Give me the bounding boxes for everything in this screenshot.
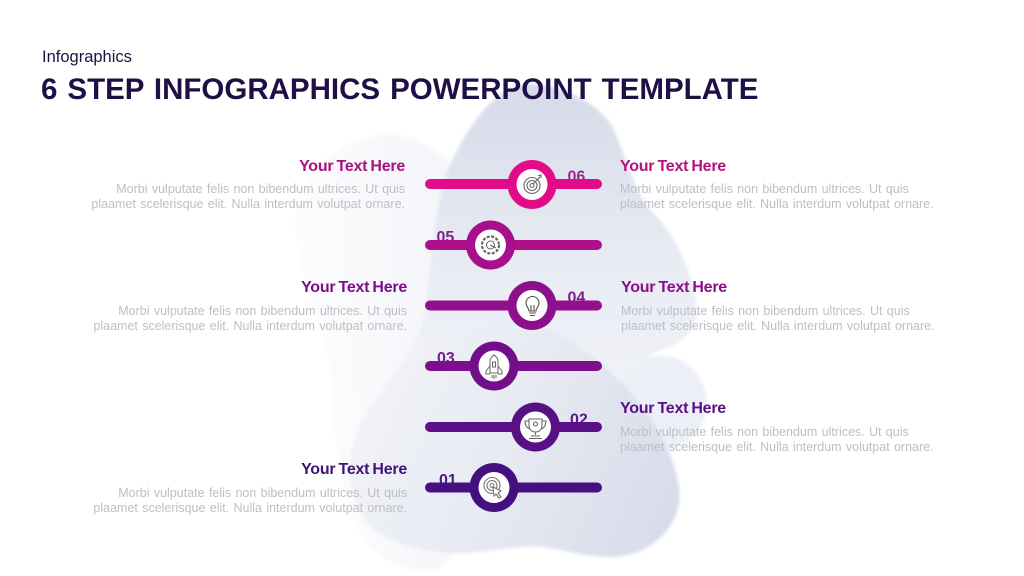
step 1 slider [425,463,602,512]
faint left blob [295,135,474,570]
step 2 slider [425,402,602,452]
text block: step 1: Your Text Here [301,461,407,478]
step 5 slider: 05 [436,229,454,246]
text block: step 3: Your Text Here [301,279,407,296]
bump blob [613,356,707,450]
text block: step 3: plaamet scelerisque elit. Nulla interdum volutpat ornare. [93,319,407,333]
title: 6 STEP INFOGRAPHICS POWERPOINT TEMPLATE [41,73,758,106]
text block: step 5: Morbi vulputate felis non bibendum ultrices. Ut quis [116,182,405,196]
text block: step 1: plaamet scelerisque elit. Nulla interdum volutpat ornare. [93,501,407,515]
lower blob [349,326,679,557]
subtitle: Infographics [42,48,132,66]
text block: step 2: Your Text Here [620,400,726,417]
text block: step 3: Morbi vulputate felis non bibendum ultrices. Ut quis [118,304,407,318]
text block: step 5: Your Text Here [299,158,405,175]
step 3 slider: 03 [437,350,455,367]
text block: step 2: Morbi vulputate felis non bibendum ultrices. Ut quis [620,424,909,438]
text block: step 6: Your Text Here [620,158,726,175]
text block: step 2: plaamet scelerisque elit. Nulla interdum volutpat ornare. [620,440,934,454]
text block: step 5 [91,158,405,211]
text block: step 6: Morbi vulputate felis non bibendum ultrices. Ut quis [620,182,909,196]
text block: step 6: plaamet scelerisque elit. Nulla interdum volutpat ornare. [620,197,934,211]
step 6 slider [425,160,602,209]
text block: step 1 [93,461,407,515]
step 1 slider: 01 [439,472,457,489]
step 2 slider: 02 [570,412,588,428]
step 4 slider: 04 [568,290,585,306]
text block: step 3 [93,279,407,333]
text block: step 4 [621,279,935,333]
step 4 slider [425,281,602,330]
step 5 slider [425,220,602,270]
text block: step 2 [620,400,934,454]
text block: step 6 [620,158,934,211]
text block: step 1: Morbi vulputate felis non bibendum ultrices. Ut quis [118,486,407,500]
step 6 slider: 06 [568,168,585,186]
step 3 slider [425,342,602,390]
text block: step 4: Morbi vulputate felis non bibendum ultrices. Ut quis [621,304,910,318]
text block: step 4: Your Text Here [621,279,727,296]
upper blob [395,84,697,407]
text block: step 5: plaamet scelerisque elit. Nulla interdum volutpat ornare. [91,197,405,211]
text block: step 4: plaamet scelerisque elit. Nulla interdum volutpat ornare. [621,319,935,333]
